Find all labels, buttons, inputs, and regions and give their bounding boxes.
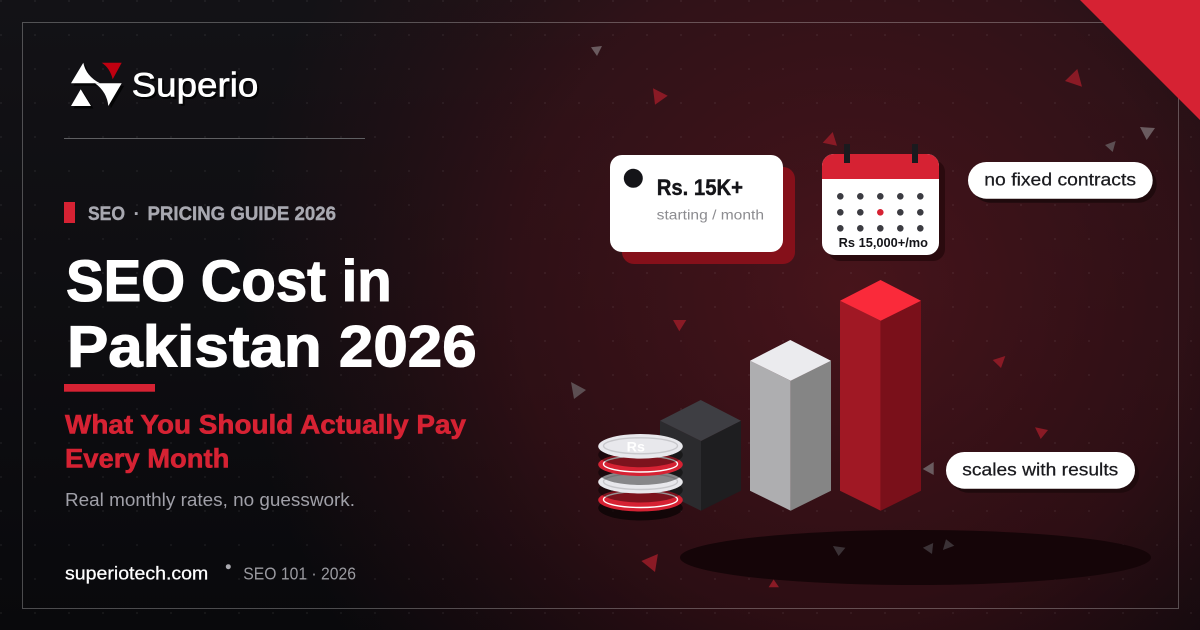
price card: starting / month [657, 207, 764, 222]
pill: scales with results [946, 452, 1139, 493]
logo [71, 63, 260, 108]
price card [610, 155, 795, 264]
price card: Rs. 15K+ [657, 175, 743, 200]
category tag: · [134, 203, 140, 225]
pill: no fixed contracts: no fixed contracts [984, 169, 1136, 189]
title [66, 249, 477, 380]
logo wordmark: Superio [132, 67, 258, 105]
category tag: PRICING GUIDE 2026 [148, 203, 336, 225]
title: SEO Cost in [66, 249, 392, 314]
triangles over ground shadow [833, 539, 954, 556]
subtitle: What You Should Actually Pay [65, 409, 466, 439]
logo wordmark: Superio [134, 69, 260, 107]
subtitle [65, 409, 466, 473]
bar: red [840, 280, 921, 511]
calendar: Rs 15,000+/mo [839, 236, 928, 250]
floating triangles [571, 46, 1155, 587]
bar: white [750, 340, 831, 511]
title: Pakistan 2026 [67, 315, 477, 380]
footer: SEO 101 · 2026 [243, 563, 356, 583]
category tag [64, 202, 336, 225]
description: Real monthly rates, no guesswork. [65, 490, 355, 510]
footer: superiotech.com [65, 563, 208, 583]
coin 4 [598, 488, 683, 520]
bar: dark [660, 400, 741, 511]
ground shadow ellipse [680, 530, 1151, 585]
corner accent triangle [1080, 0, 1200, 120]
coin 1: Rs [627, 439, 645, 455]
footer [65, 563, 356, 583]
coin 3 [598, 470, 683, 502]
pill: no fixed contracts [968, 162, 1157, 203]
subtitle: Every Month [65, 443, 229, 473]
coin stack [598, 434, 683, 520]
pill: scales with results: scales with results [962, 459, 1119, 479]
logo mark [71, 63, 124, 108]
category tag: SEO [88, 203, 125, 225]
title underline [64, 384, 155, 392]
coin 2 [598, 453, 683, 485]
calendar [822, 144, 945, 261]
bar chart: isometric bars [660, 280, 921, 511]
